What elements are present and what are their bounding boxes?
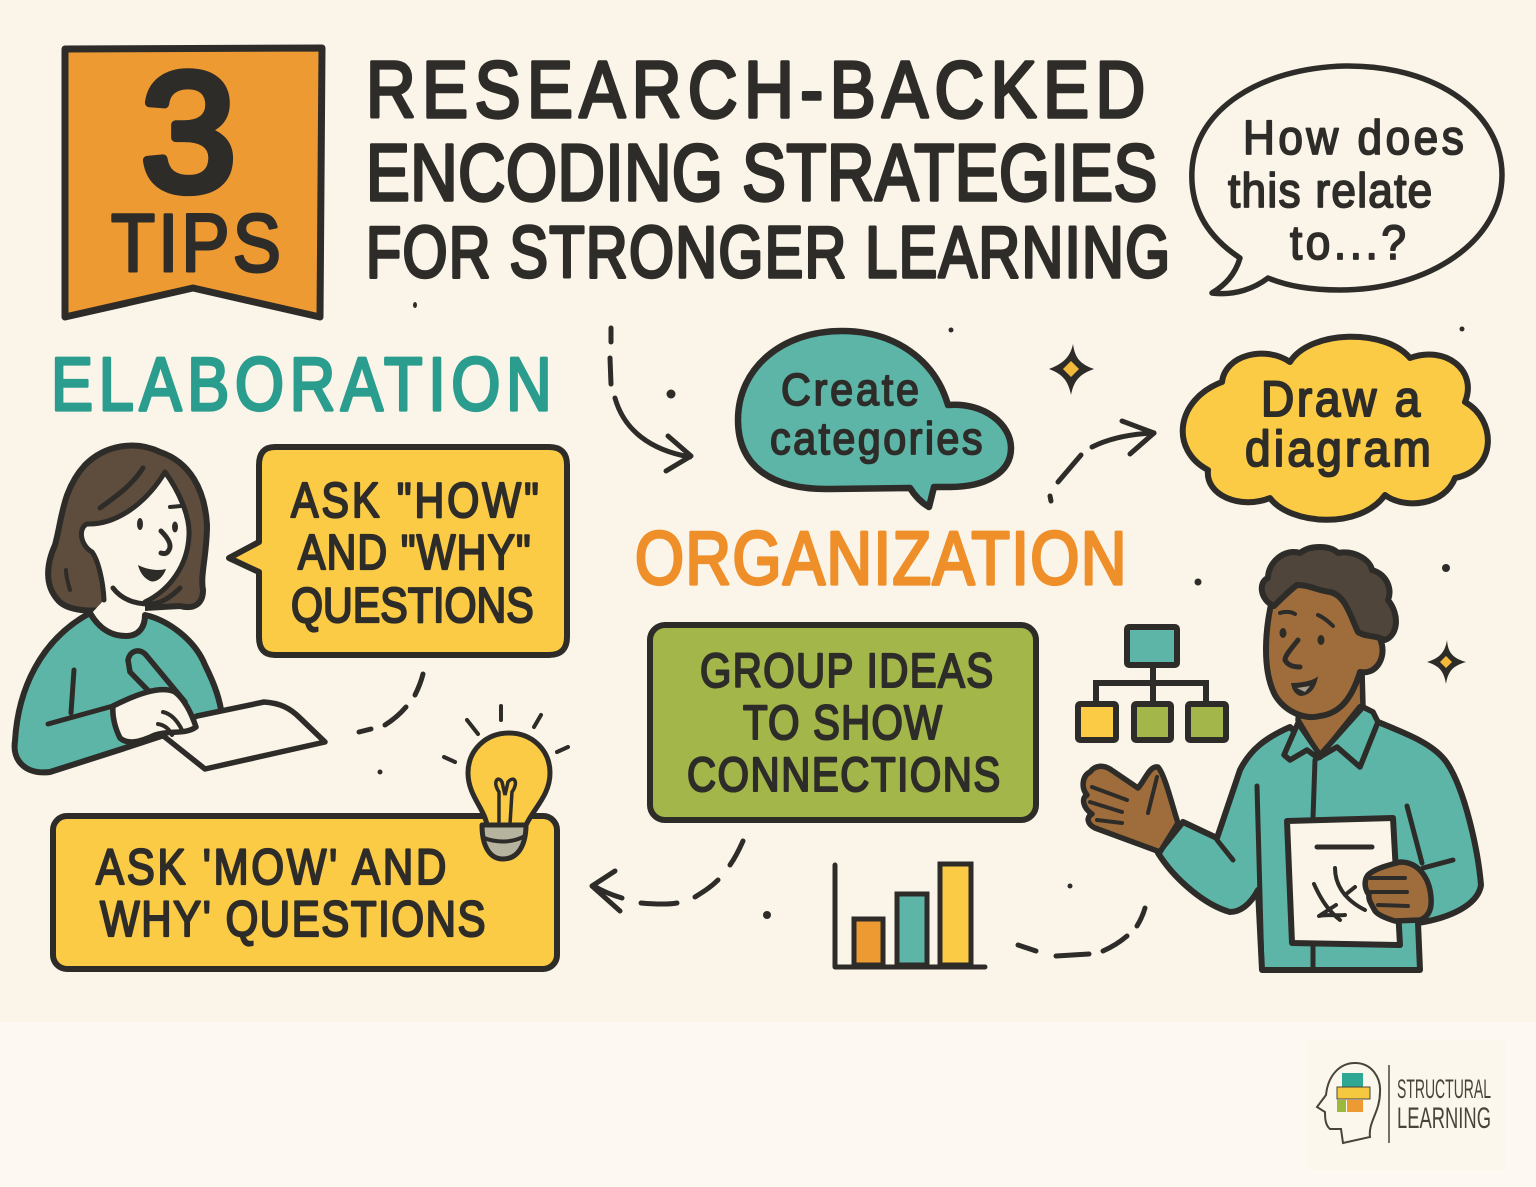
speech bubble: how does this relate: How does xyxy=(1243,110,1464,164)
title: ENCODING STRATEGIES xyxy=(366,128,1157,217)
callout: ask how and why questions xyxy=(229,447,567,655)
arrow: dashed arrow to create categories xyxy=(610,328,691,471)
arrow: dashed arrow from group ideas to ask box xyxy=(592,841,743,911)
woman face details xyxy=(137,506,181,581)
man's right hand xyxy=(1365,862,1431,921)
dashed connector: man to bar chart xyxy=(1018,908,1145,956)
icon: sparkle star top xyxy=(1049,344,1094,395)
callout: ask how and why questions: QUESTIONS xyxy=(291,578,534,633)
icon: org chart xyxy=(1078,627,1226,740)
heading: elaboration: ELABORATION xyxy=(51,342,552,426)
box: group ideas xyxy=(650,625,1036,820)
illustration: man presenting xyxy=(1083,547,1481,970)
box: group ideas: TO SHOW xyxy=(743,697,942,750)
badge: 3 tips bookmark xyxy=(65,38,322,317)
callout: ask how and why questions: ASK "HOW" xyxy=(291,473,539,528)
cloud: draw a diagram: Draw a xyxy=(1261,372,1420,427)
badge: 3 tips bookmark: TIPS xyxy=(111,198,281,289)
logo: structural learning xyxy=(1308,1040,1505,1170)
title: FOR STRONGER LEARNING xyxy=(366,212,1170,292)
dashed connector: woman to lightbulb xyxy=(359,674,423,732)
illustration: woman writing xyxy=(15,446,325,772)
callout: ask mow and why questions xyxy=(53,816,557,969)
callout: ask how and why questions: AND "WHY" xyxy=(298,525,531,580)
speech bubble: create categories: Create xyxy=(781,365,919,415)
speech bubble: how does this relate: to...? xyxy=(1290,215,1406,269)
held paper xyxy=(1287,818,1400,945)
decorative dots xyxy=(378,302,1464,919)
speech bubble: how does this relate: this relate xyxy=(1228,163,1432,217)
bar chart xyxy=(835,864,985,967)
arrow: dashed arrow to draw a diagram xyxy=(1050,421,1154,501)
cloud: draw a diagram: diagram xyxy=(1245,422,1431,477)
box: group ideas: GROUP IDEAS xyxy=(700,645,993,698)
icon: light bulb xyxy=(444,706,568,859)
icon: sparkle star right xyxy=(1427,640,1466,684)
title: RESEARCH-BACKED xyxy=(366,44,1145,134)
speech bubble: create categories xyxy=(738,331,1011,507)
man face details xyxy=(1280,612,1333,696)
callout: ask mow and why questions: ASK 'MOW' AND xyxy=(96,839,446,895)
heading: organization: ORGANIZATION xyxy=(635,516,1126,600)
title xyxy=(366,44,1170,292)
box: group ideas: CONNECTIONS xyxy=(687,749,1000,802)
speech bubble: create categories: categories xyxy=(770,414,983,464)
man's left hand xyxy=(1083,766,1178,852)
speech bubble: how does this relate xyxy=(1192,66,1502,294)
badge: 3 tips bookmark: 3 xyxy=(141,38,236,226)
cloud: draw a diagram xyxy=(1183,337,1488,520)
callout: ask mow and why questions: WHY' QUESTIONS xyxy=(100,891,486,947)
